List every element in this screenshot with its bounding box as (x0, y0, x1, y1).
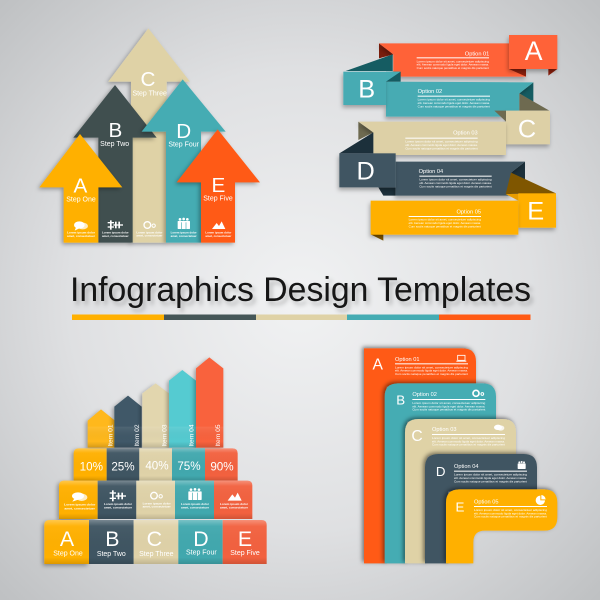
card A: Lorem ipsum dolor sit amet, consectetuer adipiscing (395, 365, 468, 369)
ribbon D: Cum sociis natoque penatibus et magnis dis parturient (419, 184, 492, 188)
arrow D: Step Four (168, 142, 200, 149)
ribbon E: E (527, 198, 544, 226)
icon: laptop (456, 355, 466, 362)
ribbon C (358, 93, 550, 155)
percent tier: 10% (80, 461, 103, 474)
icon: gears (151, 492, 162, 499)
item arrows (88, 357, 223, 448)
percent tier: 75% (177, 460, 201, 473)
card C: Cum sociis natoque penatibus et magnis dis parturient (432, 443, 505, 447)
ribbon B: Lorem ipsum dolor sit amet, consectetuer adipiscing (418, 98, 490, 102)
ribbon A: elit. Aenean commodo ligula eget dolor. Aenean massa. (417, 63, 489, 67)
arrow A (39, 134, 122, 243)
letter tier: A (60, 527, 75, 551)
card A: Cum sociis natoque penatibus et magnis dis parturient (395, 372, 468, 376)
ribbon E: elit. Aenean commodo ligula eget dolor. Aenean massa. (409, 221, 481, 225)
percent tier (74, 448, 238, 481)
icon: speech bubbles (494, 425, 504, 431)
arrow E: Step Five (203, 196, 233, 203)
ribbon B: B (358, 76, 375, 104)
item arrows: Item 01 (107, 424, 114, 447)
card E (446, 489, 557, 563)
ribbon D: Option 04 (419, 169, 443, 175)
ribbon D: Lorem ipsum dolor sit amet, consectetuer adipiscing (419, 178, 492, 182)
icon: people (188, 488, 202, 500)
card C: C (411, 428, 423, 445)
card E: Option 05 (474, 499, 499, 505)
ribbon B: elit. Aenean commodo ligula eget dolor. Aenean massa. (418, 101, 490, 105)
step captions: Lorem ipsum dolor (136, 230, 163, 234)
step captions: Lorem ipsum dolor (67, 231, 96, 235)
card B: elit. Aenean commodo ligula eget dolor. Aenean massa. (412, 404, 485, 408)
card C: elit. Aenean commodo ligula eget dolor. Aenean massa. (432, 439, 505, 443)
icon: puzzle line (110, 490, 126, 501)
icon: gears (473, 390, 484, 396)
ribbon C: Lorem ipsum dolor sit amet, consectetuer adipiscing (405, 140, 478, 144)
ribbon A (379, 35, 557, 77)
ribbon A: Option 01 (465, 51, 489, 57)
ribbon C: C (518, 115, 536, 143)
icon: mountains (228, 493, 242, 501)
icon tier: amet, consectetuer (220, 505, 249, 509)
ribbon C: elit. Aenean commodo ligula eget dolor. Aenean massa. (405, 143, 478, 147)
item arrows: Item 05 (215, 424, 222, 447)
ribbon D (339, 132, 525, 196)
ribbon C: Cum sociis natoque penatibus et magnis dis parturient (405, 146, 478, 150)
letter tier: Step Five (230, 550, 260, 557)
icon tier: amet, consectetuer (181, 505, 210, 509)
step captions: amet, consectetuer (102, 234, 130, 238)
ribbon B: Option 02 (418, 89, 442, 95)
ribbon E: Option 05 (456, 210, 481, 216)
step captions (67, 230, 232, 238)
percent tier: 40% (145, 459, 169, 472)
ribbon E (371, 173, 556, 241)
panel: nested option cards (364, 348, 557, 563)
icon: speech bubbles (72, 492, 87, 502)
letter tier (44, 520, 267, 564)
icon tier: Lorem ipsum dolor (181, 502, 210, 506)
card C: Lorem ipsum dolor sit amet, consectetuer adipiscing (432, 436, 505, 440)
ribbon E: Cum sociis natoque penatibus et magnis dis parturient (409, 224, 481, 228)
icon tier: amet, consectetuer (104, 505, 133, 509)
percent tier: 25% (111, 460, 135, 473)
arrow D (142, 79, 226, 243)
card A: Option 01 (395, 357, 420, 363)
card B: Cum sociis natoque penatibus et magnis dis parturient (412, 408, 485, 412)
icon: people (518, 461, 526, 469)
panel: ribbon options (339, 35, 557, 241)
card D: Cum sociis natoque penatibus et magnis dis parturient (454, 479, 527, 483)
card D: elit. Aenean commodo ligula eget dolor. Aenean massa. (454, 476, 527, 480)
item arrows: Item 02 (134, 424, 141, 447)
arrow B: B (108, 119, 122, 142)
card D: D (436, 464, 445, 479)
card B: B (396, 393, 405, 408)
ribbon C: Option 03 (453, 131, 478, 137)
title colour bar (72, 314, 530, 320)
icon: pie chart (536, 495, 546, 505)
card D (425, 454, 537, 563)
ribbon B: Cum sociis natoque penatibus et magnis dis parturient (418, 104, 490, 108)
icon tier: Lorem ipsum dolor (64, 503, 96, 507)
step captions: Lorem ipsum dolor (171, 231, 198, 235)
card E: Lorem ipsum dolor sit amet, consectetuer adipiscing (474, 508, 547, 512)
title: Infographics Design Templates (70, 271, 531, 309)
ribbon B (343, 54, 533, 117)
card D: Option 04 (454, 464, 479, 470)
icon tier: Lorem ipsum dolor (220, 502, 249, 506)
arrow C (108, 28, 190, 243)
icon tier: Lorem ipsum dolor (104, 502, 133, 506)
letter tier: E (238, 527, 252, 551)
card E: elit. Aenean commodo ligula eget dolor. Aenean massa. (474, 511, 547, 515)
letter tier: B (105, 527, 119, 551)
arrow A: Step One (66, 196, 96, 203)
card E: Cum sociis natoque penatibus et magnis dis parturient (474, 515, 547, 519)
card E: E (456, 499, 465, 514)
letter tier: D (193, 527, 209, 551)
step captions: Lorem ipsum dolor (205, 231, 232, 235)
ribbon A: Cum sociis natoque penatibus et magnis dis parturient (417, 66, 489, 70)
card B: Lorem ipsum dolor sit amet, consectetuer adipiscing (412, 401, 486, 405)
ribbon D: D (357, 158, 375, 186)
arrow E (177, 129, 260, 243)
arrow B (73, 85, 157, 243)
icon tier: amet, consectetuer (143, 505, 172, 509)
icon tier: Lorem ipsum dolor (143, 501, 172, 505)
step captions: amet, consectetuer (171, 234, 198, 238)
item arrows: Item 04 (188, 424, 195, 447)
arrow D: D (176, 120, 191, 143)
item arrows: Item 03 (162, 424, 169, 447)
icon: people (178, 218, 190, 229)
ribbon D: elit. Aenean commodo ligula eget dolor. Aenean massa. (419, 181, 492, 185)
letter tier: Step Two (97, 551, 126, 558)
arrow B: Step Two (100, 141, 129, 148)
card B: Option 02 (412, 392, 437, 398)
letter tier: Step One (53, 551, 83, 558)
icon tier: amet, consectetuer (64, 506, 96, 510)
card C: Option 03 (432, 427, 457, 433)
panel: five arrows (39, 28, 260, 243)
card A: elit. Aenean commodo ligula eget dolor. Aenean massa. (395, 369, 468, 373)
icon: gears (144, 222, 155, 228)
card A (364, 348, 476, 563)
step captions: amet, consectetuer (205, 234, 232, 238)
step captions: Lorem ipsum dolor (102, 231, 130, 235)
arrow E: E (211, 174, 225, 197)
icon: puzzle line (108, 220, 123, 230)
step captions: amet, consectetuer (67, 234, 96, 238)
arrow C: Step Three (132, 91, 167, 98)
card D: Lorem ipsum dolor sit amet, consectetuer adipiscing (454, 473, 527, 477)
arrow A: A (73, 175, 87, 198)
step captions: amet, consectetuer (136, 233, 163, 237)
panel: staircase chart (44, 357, 267, 564)
card A: A (372, 357, 383, 374)
ribbon E: Lorem ipsum dolor sit amet, consectetuer adipiscing (409, 218, 481, 222)
icon: speech bubbles (74, 221, 88, 231)
percent tier: 90% (210, 460, 234, 473)
card B (385, 383, 496, 563)
card C (405, 419, 516, 563)
ribbon A: A (525, 36, 543, 66)
arrow C: C (141, 68, 156, 91)
letter tier: C (147, 527, 162, 551)
letter tier: Step Four (186, 550, 217, 557)
letter tier: Step Three (139, 551, 174, 558)
icon: mountains (212, 221, 225, 229)
icon tier (59, 481, 252, 519)
ribbon A: Lorem ipsum dolor sit amet, consectetuer adipiscing (417, 59, 489, 63)
